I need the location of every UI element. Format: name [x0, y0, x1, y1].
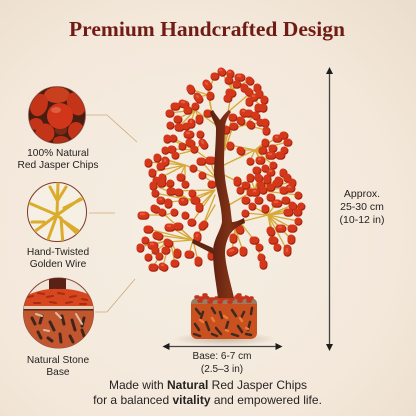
- label: height: 25-30 cm: [340, 201, 384, 213]
- panel: natural stone base feature: [22, 276, 135, 378]
- label: base width: Base: 6-7 cm: [193, 351, 251, 362]
- panel: gemstone tree: [140, 70, 302, 346]
- caption: for a balanced vitality and empowered life.: [93, 393, 322, 407]
- title: Premium Handcrafted Design: [69, 17, 345, 41]
- label: hand-twisted golden wire: Golden Wire: [30, 259, 87, 270]
- panel: red jasper chips feature: [18, 86, 137, 171]
- icon: stone base circle: [22, 276, 96, 350]
- label: hand-twisted golden wire: Hand-Twisted: [27, 247, 89, 258]
- arrow: base width dimension: [162, 343, 282, 350]
- label: 100% natural red jasper chips: Red Jasper Chips: [18, 160, 98, 171]
- arrow: wire callout: [89, 212, 115, 214]
- label: base width: (2.5–3 in): [201, 364, 243, 375]
- stone base: [191, 298, 257, 339]
- label: 100% natural red jasper chips: 100% Natural: [27, 148, 89, 159]
- caption: Made with Natural Red Jasper Chips: [109, 378, 307, 392]
- label: height: Approx.: [344, 188, 380, 200]
- icon: twisted golden wire circle: [28, 182, 86, 245]
- golden wire branches: [140, 71, 301, 267]
- label: natural stone base: Base: [46, 367, 70, 378]
- arrow: base callout: [95, 279, 135, 312]
- arrow: height dimension: [326, 67, 333, 351]
- arrow: chips callout: [86, 115, 137, 142]
- red jasper chips: [140, 70, 302, 268]
- label: natural stone base: Natural Stone: [27, 355, 89, 366]
- red chips on base: [196, 295, 252, 302]
- panel: golden wire feature: [27, 182, 115, 270]
- icon: red jasper chips circle: [27, 86, 89, 146]
- label: height: (10-12 in): [340, 214, 384, 226]
- trunk and branches: [192, 110, 245, 298]
